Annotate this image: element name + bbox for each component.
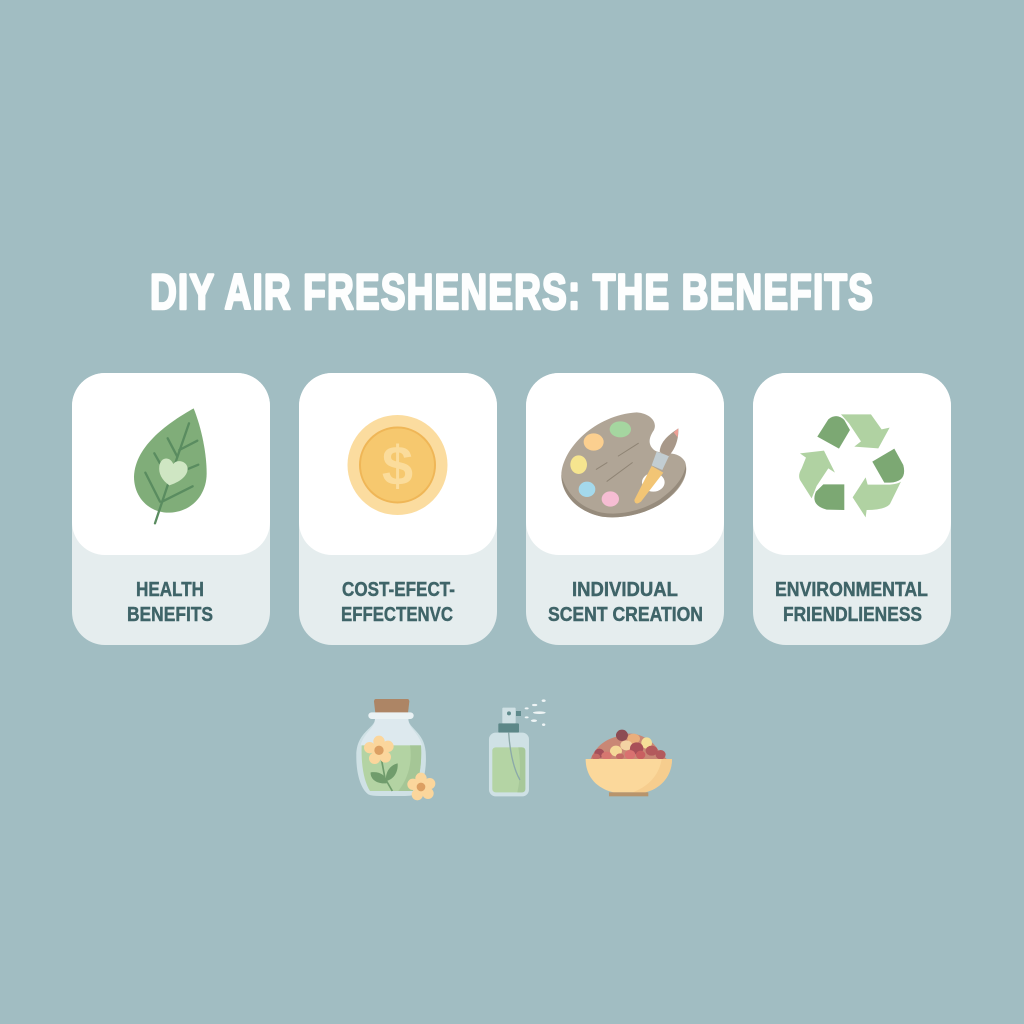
- label: individual scent creation: INDIVIDUAL: [572, 578, 678, 601]
- icon: coin: $: [382, 434, 413, 497]
- panel: health benefits: [72, 373, 270, 645]
- label: environmental friendliness: FRIENDLIENESS: [783, 603, 922, 626]
- icon: flower jar: [356, 699, 435, 800]
- icon: leaf with heart: [134, 408, 207, 523]
- panel: individual scent creation: [526, 373, 724, 645]
- icon: paintbrush: [634, 428, 678, 503]
- icon: bowl of potpourri: [586, 730, 672, 796]
- label: health benefits: HEALTH: [136, 578, 204, 601]
- label: health benefits: [127, 578, 213, 626]
- icon: recycling arrows: [799, 414, 904, 517]
- label: cost-effectiveness: COST-EFECT-: [342, 578, 455, 601]
- label: cost-effectiveness: [341, 578, 455, 626]
- panel: environmental friendliness: [753, 373, 951, 645]
- label: health benefits: BENEFITS: [127, 603, 213, 626]
- spray mist: [525, 699, 546, 726]
- panel: cost-effectiveness: [299, 373, 497, 645]
- label: environmental friendliness: ENVIRONMENTAL: [775, 578, 928, 601]
- icon: coin: [348, 415, 448, 515]
- label: environmental friendliness: [775, 578, 928, 626]
- label: cost-effectiveness: EFFECTENVC: [341, 603, 453, 626]
- label: individual scent creation: [548, 578, 703, 626]
- icon: paint palette: [561, 412, 686, 517]
- icon: spray bottle: [489, 699, 546, 796]
- label: individual scent creation: SCENT CREATION: [548, 603, 703, 626]
